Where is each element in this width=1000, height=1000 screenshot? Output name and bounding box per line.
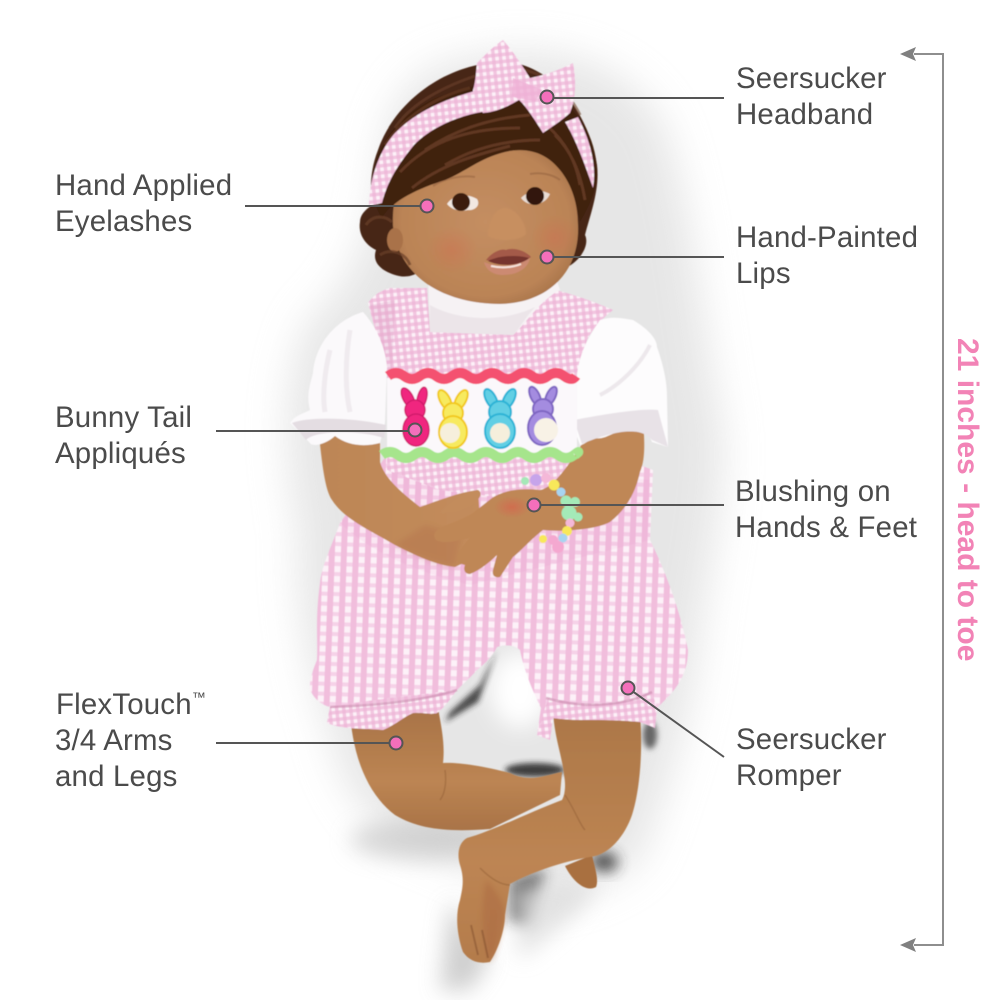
bunny appliqués xyxy=(398,385,559,448)
doll left leg xyxy=(350,708,562,830)
pink bunny xyxy=(398,386,429,446)
callout: blushing on hands and feet xyxy=(528,475,917,544)
callout: hand-painted lips: Lips xyxy=(736,257,791,290)
purple bunny xyxy=(527,385,559,445)
callout: hand-painted lips xyxy=(540,221,918,290)
callout: seersucker headband: Headband xyxy=(736,98,873,131)
height label: 21 inches - head to toe xyxy=(951,338,984,661)
bib smocked panel xyxy=(387,378,577,455)
mouth xyxy=(484,249,531,275)
headband xyxy=(369,90,482,206)
hair front xyxy=(366,68,597,265)
callout: bunny tail appliqués: Bunny Tail xyxy=(55,401,192,434)
callout: hand applied eyelashes: Hand Applied xyxy=(55,169,232,202)
callout: blushing on hands and feet: Blushing on xyxy=(735,475,891,508)
callout: hand applied eyelashes xyxy=(55,169,434,238)
ear xyxy=(387,228,403,252)
romper lower xyxy=(310,450,688,740)
bracelet xyxy=(521,473,582,553)
left sleeve xyxy=(290,312,387,445)
drop shadow behind doll xyxy=(288,52,722,990)
thumb xyxy=(440,490,481,513)
callout: seersucker headband xyxy=(540,62,887,131)
callout: flextouch arms and legs: 3/4 Arms xyxy=(55,724,173,757)
left eye xyxy=(447,193,478,211)
yellow bunny xyxy=(435,388,471,448)
left arm xyxy=(318,425,480,567)
callout: seersucker headband: Seersucker xyxy=(736,62,887,95)
face xyxy=(393,140,578,304)
callout: flextouch arms and legs xyxy=(55,688,402,793)
doll illustration xyxy=(290,40,688,963)
right eye xyxy=(521,187,550,205)
right sleeve xyxy=(572,318,668,447)
collar xyxy=(428,275,560,335)
callout: hand-painted lips: Hand-Painted xyxy=(736,221,918,254)
hand blush xyxy=(494,496,530,518)
eyebrows xyxy=(433,173,560,186)
height bracket arrow xyxy=(900,47,943,952)
callout: flextouch arms and legs: ™ xyxy=(192,689,206,705)
callout: bunny tail appliqués xyxy=(55,401,422,470)
callout: flextouch arms and legs: FlexTouch xyxy=(56,688,206,721)
callout: hand applied eyelashes: Eyelashes xyxy=(55,205,192,238)
green rick-rack xyxy=(382,452,578,458)
foot behind xyxy=(565,855,597,889)
right ruffle xyxy=(537,692,657,740)
callout: flextouch arms and legs: and Legs xyxy=(55,760,178,793)
right arm and hand xyxy=(434,420,644,577)
callout: seersucker romper: Seersucker xyxy=(736,723,887,756)
left ruffle xyxy=(327,690,457,730)
blue bunny xyxy=(481,387,519,448)
hair back xyxy=(360,62,598,277)
callout: bunny tail appliqués: Appliqués xyxy=(55,437,186,470)
cheeks xyxy=(426,226,478,274)
bib xyxy=(368,288,613,500)
nose xyxy=(488,208,526,240)
callout: blushing on hands and feet: Hands & Feet xyxy=(735,511,917,544)
callout: seersucker romper xyxy=(622,682,887,792)
doll right leg and foot xyxy=(457,712,641,963)
callout: seersucker romper: Romper xyxy=(736,759,842,792)
bow xyxy=(473,40,575,133)
red rick-rack xyxy=(388,373,576,379)
